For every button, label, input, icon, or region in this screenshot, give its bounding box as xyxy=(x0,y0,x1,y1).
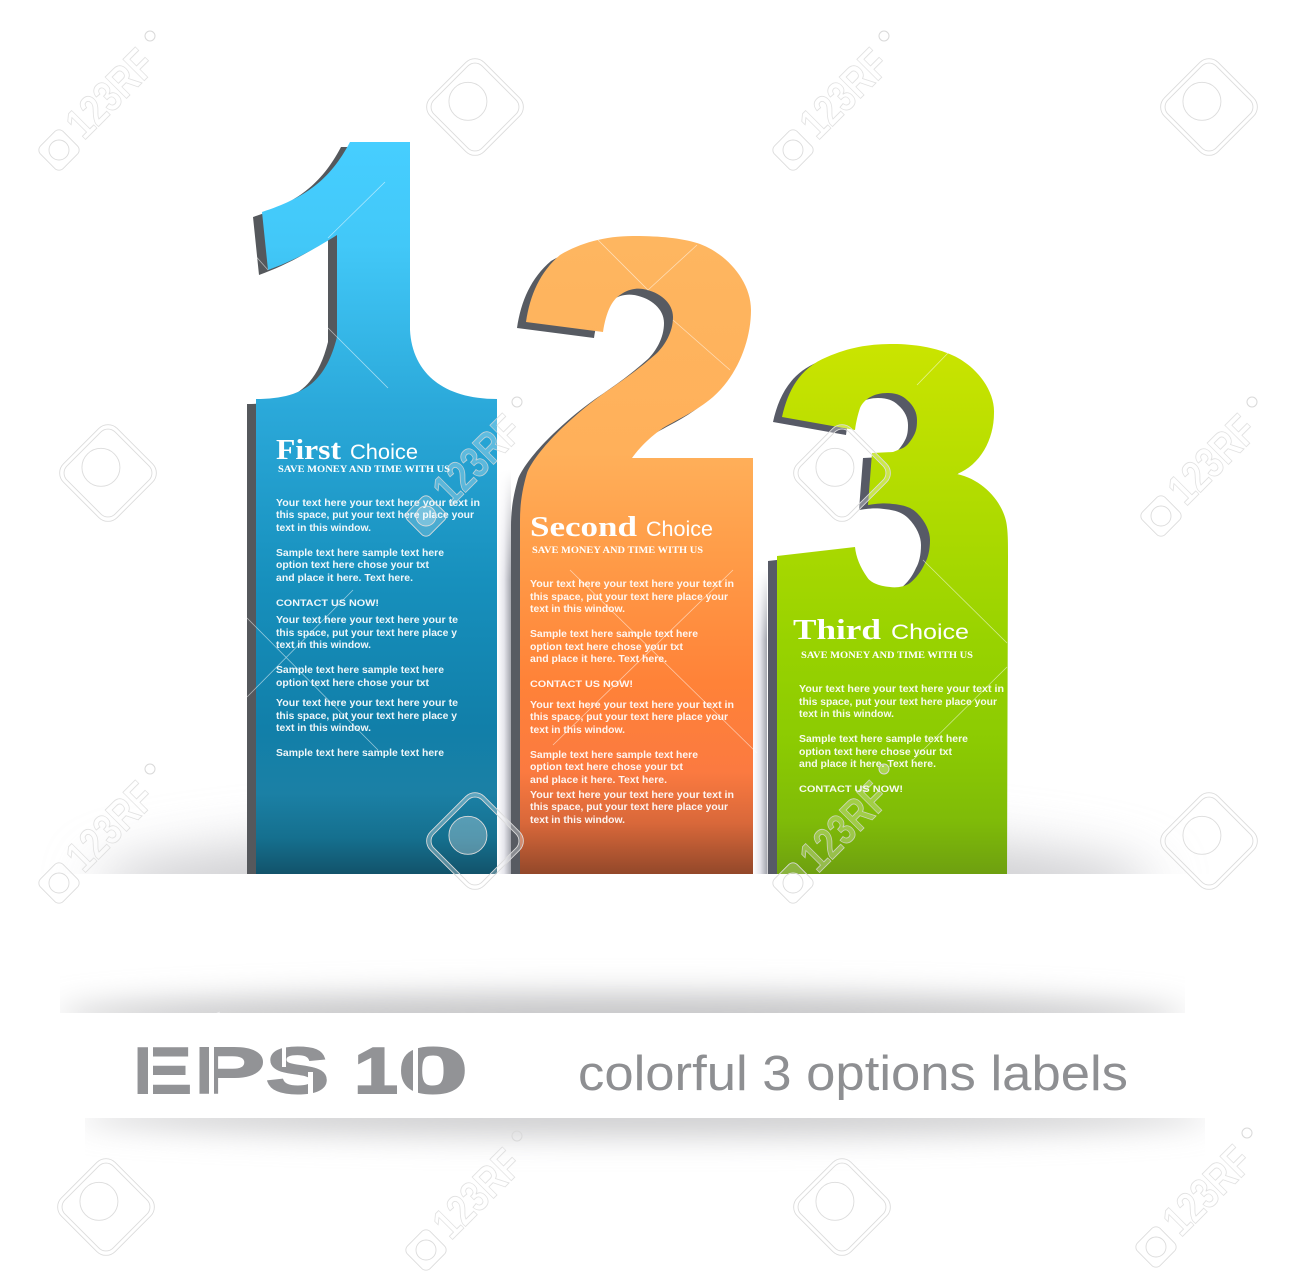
watermark: stamps, top row: 123RF xyxy=(790,40,899,148)
body text: text in this window. xyxy=(276,640,371,651)
body text: Your text here your text here your te xyxy=(276,698,458,709)
subheading: SAVE MONEY AND TIME WITH US xyxy=(278,464,450,474)
body text: Your text here your text here your text in xyxy=(530,579,734,590)
gaps between panels xyxy=(497,470,767,874)
body text: option text here chose your txt xyxy=(276,560,430,571)
panel: second choice xyxy=(511,236,753,874)
body text: option text here chose your txt xyxy=(530,642,684,653)
body text: Sample text here sample text here xyxy=(799,734,968,745)
watermark: stamps, second row: 123RF xyxy=(1158,406,1267,514)
body text: this space, put your text here place y xyxy=(276,628,457,639)
body text: Sample text here sample text here xyxy=(276,748,444,759)
body text: this space, put your text here place your xyxy=(530,592,728,603)
watermark: stamps, top row: 123RF xyxy=(56,40,165,148)
body text: this space, put your text here place your xyxy=(530,712,728,723)
watermark: stamps, top row xyxy=(36,31,1263,173)
body text: and place it here. Text here. xyxy=(530,775,667,786)
EPS 10 badge text: P xyxy=(194,1034,265,1107)
heading: Choice: Choice xyxy=(891,621,969,644)
tagline: colorful 3 options labels xyxy=(578,1047,1128,1101)
panel: first choice xyxy=(247,142,497,874)
body text: Your text here your text here your te xyxy=(276,615,458,626)
body text: Your text here your text here your text in xyxy=(530,700,734,711)
strip shadow upper xyxy=(62,978,1182,1013)
body text: this space, put your text here place your xyxy=(276,510,474,521)
body text: Your text here your text here your text in xyxy=(276,498,480,509)
watermark: stamps, third row: 123RF xyxy=(56,773,165,881)
body text: and place it here. Text here. xyxy=(530,654,667,665)
white paper strip xyxy=(0,874,1300,1013)
EPS 10 badge text: 0 xyxy=(398,1034,468,1107)
EPS 10 badge text xyxy=(133,1034,468,1107)
number 3 label shape xyxy=(777,344,1008,874)
heading: First: First xyxy=(276,434,341,466)
body text: text in this window. xyxy=(276,523,371,534)
body text: and place it here. Text here. xyxy=(799,759,936,770)
subheading: SAVE MONEY AND TIME WITH US xyxy=(532,545,703,555)
number 3 shadow xyxy=(768,349,999,874)
watermark: stamps, bottom row xyxy=(52,1128,1262,1273)
body text: option text here chose your txt xyxy=(530,762,684,773)
watermark: stamps, second row xyxy=(54,397,1267,539)
panel: third choice xyxy=(768,344,1008,874)
subheading: SAVE MONEY AND TIME WITH US xyxy=(801,650,973,660)
body text: Sample text here sample text here xyxy=(276,548,444,559)
body text: text in this window. xyxy=(530,604,625,615)
body text: this space, put your text here place your xyxy=(799,697,997,708)
watermark: stamps, bottom row: 123RF xyxy=(1153,1137,1262,1245)
number 1 label shape xyxy=(256,142,497,874)
watermark: stamps, third row: 123RF xyxy=(790,773,899,881)
body text: option text here chose your txt xyxy=(799,747,953,758)
EPS 10 badge text: E xyxy=(133,1034,192,1107)
body text: CONTACT US NOW! xyxy=(799,784,903,795)
EPS 10 badge text: 1 xyxy=(354,1034,398,1107)
body text: text in this window. xyxy=(276,723,371,734)
body text xyxy=(276,498,480,759)
body text: text in this window. xyxy=(799,709,894,720)
body text: text in this window. xyxy=(530,815,625,826)
body text: Your text here your text here your text in xyxy=(799,684,1004,695)
heading: Choice: Choice xyxy=(646,518,713,541)
heading: Third: Third xyxy=(793,614,881,646)
EPS 10 badge text: S xyxy=(266,1034,329,1107)
watermark: stamps, second row: 123RF xyxy=(423,406,532,514)
body text: and place it here. Text here. xyxy=(276,573,413,584)
body text: Sample text here sample text here xyxy=(530,629,698,640)
body text: option text here chose your txt xyxy=(276,678,430,689)
body text: this space, put your text here place y xyxy=(276,711,457,722)
body text: this space, put your text here place your xyxy=(530,802,728,813)
body text xyxy=(799,684,1004,795)
heading: Choice: Choice xyxy=(350,441,418,464)
watermark: stamps, bottom row: 123RF xyxy=(423,1140,532,1248)
body text xyxy=(530,579,734,826)
heading: Second: Second xyxy=(530,511,637,543)
body text: Your text here your text here your text in xyxy=(530,790,734,801)
body text: text in this window. xyxy=(530,725,625,736)
watermark: stamps, third row xyxy=(36,764,1263,906)
number 2 shadow xyxy=(511,242,744,874)
body text: Sample text here sample text here xyxy=(530,750,698,761)
cast shadow behind panels xyxy=(95,830,1155,940)
body text: CONTACT US NOW! xyxy=(530,679,633,690)
body text: Sample text here sample text here xyxy=(276,665,444,676)
watermark: thin diagonal lines xyxy=(207,182,1007,1017)
strip shadow lower xyxy=(89,1118,1201,1150)
number 2 label shape xyxy=(520,236,753,874)
body text: CONTACT US NOW! xyxy=(276,598,379,609)
number 1 shadow xyxy=(247,147,488,874)
